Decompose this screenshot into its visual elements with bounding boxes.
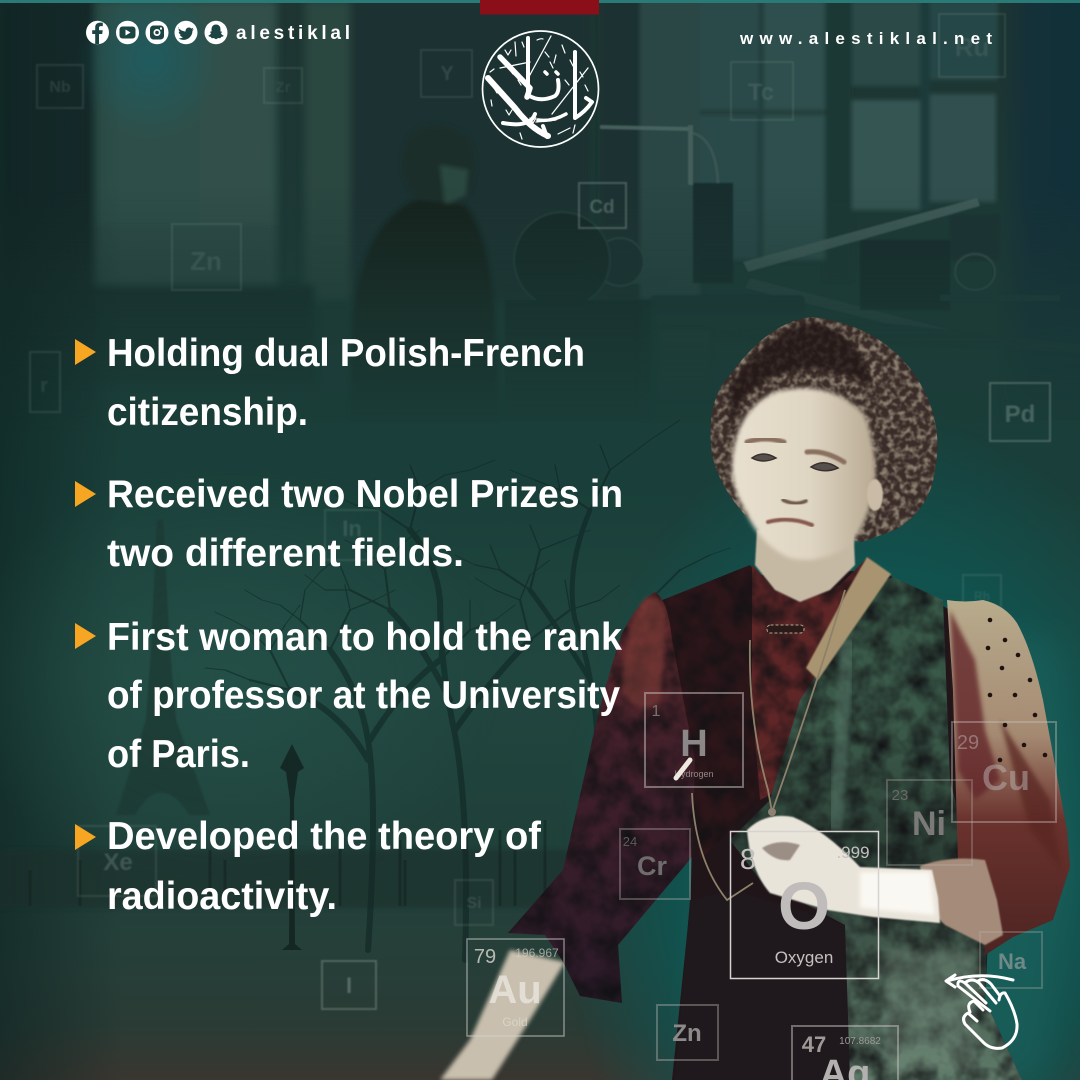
faint periodic table tiles: Nb xyxy=(49,79,71,96)
faint periodic table tiles: Y xyxy=(440,63,454,85)
green pinafore xyxy=(730,577,1022,1080)
tile: silver xyxy=(792,1026,898,1080)
tile: copper: 29 xyxy=(957,732,979,754)
lamp post xyxy=(280,744,304,950)
bullet: first woman professor: of professor at the University xyxy=(107,674,620,717)
tile: silver: 107.8682 xyxy=(839,1036,881,1047)
website url: www.alestiklal.net xyxy=(739,29,992,48)
icon: instagram xyxy=(146,21,168,44)
icon: youtube xyxy=(116,21,139,44)
skirt and dress dark base xyxy=(650,570,1022,1080)
tile: oxygen: 8 xyxy=(740,844,756,876)
bullet: radioactivity theory: Developed the theory of xyxy=(107,815,542,858)
icon: facebook xyxy=(86,21,109,44)
maroon blouse xyxy=(752,557,885,800)
ear xyxy=(867,479,883,511)
periodic tiles over portrait xyxy=(467,693,1056,1080)
faint periodic table tiles: r xyxy=(40,375,48,397)
tile: nickel: 23 xyxy=(892,787,908,804)
hair xyxy=(710,317,938,542)
bullet: dual citizenship: citizenship. xyxy=(107,391,308,434)
bullet: radioactivity theory xyxy=(75,815,542,918)
winter trees xyxy=(205,420,730,960)
lab scene, fading into the teal xyxy=(28,3,1080,352)
icon: snapchat xyxy=(204,21,228,44)
neck xyxy=(755,520,855,602)
lace cuff xyxy=(920,858,1003,945)
facial features xyxy=(747,439,844,525)
tile: oxygen: O xyxy=(778,869,830,944)
tile: zinc xyxy=(657,1005,718,1060)
faint periodic table tiles: Cd xyxy=(589,197,615,218)
halo behind figure xyxy=(690,590,1080,1080)
faint periodic table tiles: Pd xyxy=(1005,401,1035,428)
header: social icons and handle xyxy=(86,21,350,44)
tree line and ground edge xyxy=(0,850,640,908)
tile: copper: Cu xyxy=(982,757,1030,798)
tile: nickel: Ni xyxy=(912,805,946,843)
logo: calligraphy roundel xyxy=(482,31,598,147)
bullet list xyxy=(75,332,623,918)
tile: gold: 196.967 xyxy=(515,946,559,960)
tile: gold: Au xyxy=(488,968,542,1012)
icon: twitter xyxy=(174,21,198,44)
faint periodic table tiles: Tc xyxy=(748,79,774,106)
tile: chromium: Cr xyxy=(637,851,667,881)
left sleeve xyxy=(508,592,695,1003)
tile: oxygen: .999 xyxy=(836,843,870,862)
tile: gold: 79 xyxy=(474,946,496,968)
tan shoulder strip xyxy=(806,557,891,680)
tile: oxygen: Oxygen xyxy=(775,948,833,967)
tile: hydrogen: H xyxy=(680,723,708,765)
eiffel tower xyxy=(116,520,210,815)
faint periodic table tiles: Rh xyxy=(974,589,990,603)
red top tab xyxy=(480,0,599,14)
tile: oxygen xyxy=(730,832,878,978)
top strip xyxy=(0,0,1080,3)
bullet: two Nobel Prizes: Received two Nobel Prizes in xyxy=(107,473,623,516)
faint periodic table tiles: Xe xyxy=(103,849,133,876)
lab machinery xyxy=(520,124,996,293)
tile: silver: 47 xyxy=(802,1032,826,1057)
icon: swipe hand gesture xyxy=(946,975,1017,1048)
tile: chromium xyxy=(620,829,690,899)
tile: gold: Gold xyxy=(502,1015,528,1029)
faint periodic table tiles: I xyxy=(346,973,352,998)
necklace xyxy=(692,590,845,900)
lab windows xyxy=(639,3,998,288)
bullet: two Nobel Prizes: two different fields. xyxy=(107,532,464,575)
tile: hydrogen: 1 xyxy=(652,703,661,720)
bullet: first woman professor: First woman to hold the rank xyxy=(107,616,622,659)
face xyxy=(732,388,875,560)
bullet: radioactivity theory: radioactivity. xyxy=(107,875,337,918)
bullet: first woman professor xyxy=(75,616,622,776)
right sleeve xyxy=(947,600,1070,955)
teal right side xyxy=(560,330,1080,1080)
tile: gold xyxy=(467,939,564,1036)
left dark edge xyxy=(0,0,120,1080)
faint periodic table tiles: Ru xyxy=(955,32,989,62)
light area mid-left xyxy=(0,460,500,900)
shadow figure in lab xyxy=(353,128,494,352)
tile: copper xyxy=(952,722,1056,822)
dark skirt panel xyxy=(675,890,850,1080)
left forearm xyxy=(440,950,565,1080)
bullet: two Nobel Prizes xyxy=(75,473,623,575)
hand on pendant xyxy=(747,816,940,923)
brooch xyxy=(767,625,804,633)
faint lower lab furniture xyxy=(640,300,1080,473)
plaster wall xyxy=(28,3,585,284)
figure: Marie Curie portrait xyxy=(440,317,1080,1080)
faint periodic table tiles: In xyxy=(342,516,362,541)
maroon vest xyxy=(650,565,770,860)
tile: zinc: Zn xyxy=(672,1020,702,1047)
faint periodic table tiles: Zr xyxy=(276,79,291,96)
tile: chromium: 24 xyxy=(623,834,637,849)
bullet: dual citizenship xyxy=(75,332,585,434)
bullet: first woman professor: of Paris. xyxy=(107,733,250,776)
tile: sodium xyxy=(980,932,1042,988)
tile: sodium: Na xyxy=(998,949,1027,974)
tile: hydrogen: Hydrogen xyxy=(674,769,714,779)
tile: nickel xyxy=(887,780,972,865)
handle: alestiklal xyxy=(236,23,350,44)
bullet: dual citizenship: Holding dual Polish-French xyxy=(107,332,585,375)
faint periodic table tiles: Zn xyxy=(190,246,222,276)
tile: hydrogen xyxy=(645,693,743,787)
faint periodic table tiles: Si xyxy=(466,895,482,912)
